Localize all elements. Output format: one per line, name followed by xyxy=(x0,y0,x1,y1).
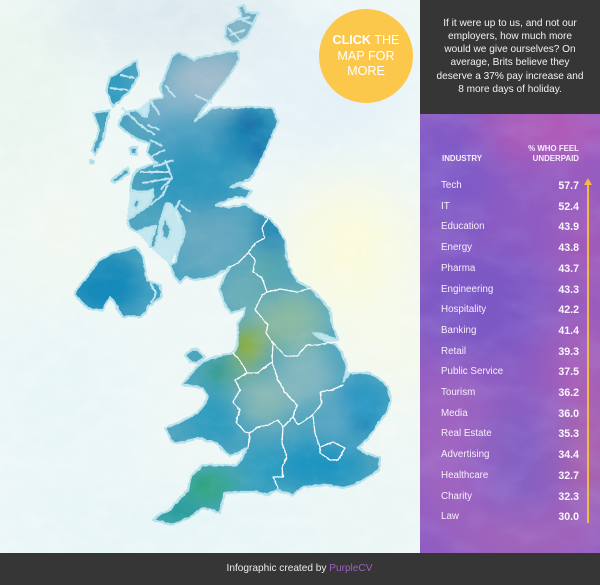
table header xyxy=(442,144,579,163)
table rows: Hospitality xyxy=(441,304,486,315)
table rows: 30.0 xyxy=(558,511,579,523)
table rows: 32.7 xyxy=(558,470,579,482)
East / South East xyxy=(313,415,320,447)
Wales / West Midlands xyxy=(233,373,250,448)
Yorkshire / East Midlands xyxy=(273,342,337,356)
region boundaries xyxy=(230,218,345,488)
North East / Yorkshire xyxy=(267,288,310,292)
table rows: 36.2 xyxy=(558,387,579,399)
watercolour land fill xyxy=(73,4,392,526)
footer credit: Infographic created by PurpleCV xyxy=(227,563,372,574)
map: United Kingdom regions xyxy=(73,4,392,526)
pale sea-loch wash on the west coast xyxy=(118,100,350,382)
table rows: 43.9 xyxy=(558,221,579,233)
table rows: 34.4 xyxy=(558,449,579,461)
intro text panel: 8 more days of holiday. xyxy=(458,84,562,95)
callout: click the map: CLICK THE xyxy=(333,33,399,47)
footer credit xyxy=(0,553,600,585)
table rows: 35.3 xyxy=(558,428,579,440)
intro text panel: average, Brits believe they xyxy=(451,57,569,68)
table rows: Education xyxy=(441,221,485,232)
intro text panel xyxy=(420,0,600,114)
Yorkshire / North West xyxy=(255,292,273,343)
table rows: Engineering xyxy=(441,284,493,295)
South West / South East xyxy=(273,427,287,488)
table rows: Banking xyxy=(441,325,476,336)
table rows: Public Service xyxy=(441,366,503,377)
table rows: 36.0 xyxy=(558,408,579,420)
callout: click the map: MORE xyxy=(347,64,385,78)
table rows xyxy=(441,180,579,523)
table rows: 42.2 xyxy=(558,304,579,316)
map area with watercolour background xyxy=(0,0,420,553)
table rows: Pharma xyxy=(441,263,475,274)
table rows: Healthcare xyxy=(441,470,488,481)
table rows: Advertising xyxy=(441,449,489,460)
table rows: Tourism xyxy=(441,387,475,398)
panel: industry table xyxy=(420,114,600,553)
pale coastline wash xyxy=(74,5,391,525)
West Midlands / East Midlands xyxy=(272,362,297,427)
West Midlands / South West xyxy=(250,420,283,433)
table rows: 32.3 xyxy=(558,491,579,503)
table rows: 37.5 xyxy=(558,366,579,378)
intro text panel: If it were up to us, and not our xyxy=(443,18,577,29)
North West / Wales xyxy=(233,353,272,373)
intro text panel: employers, how much more xyxy=(448,31,572,42)
table rows: 57.7 xyxy=(558,180,579,192)
East Midlands / East xyxy=(293,385,343,425)
table rows: 43.7 xyxy=(558,263,579,275)
table rows: 52.4 xyxy=(558,201,579,213)
table rows: Energy xyxy=(441,242,472,253)
intro text panel: deserve a 37% pay increase and xyxy=(436,71,584,82)
table rows: 41.4 xyxy=(558,325,579,337)
intro text panel: would we give ourselves? On xyxy=(444,44,576,55)
arrow: scale upward xyxy=(584,178,592,523)
table header: % WHO FEEL xyxy=(528,144,579,153)
London xyxy=(320,442,345,460)
table rows: 43.8 xyxy=(558,242,579,254)
table header: UNDERPAID xyxy=(533,154,579,163)
watercolour background xyxy=(0,0,440,570)
North West / Midlands xyxy=(272,343,273,362)
table rows: Tech xyxy=(441,180,462,191)
table rows: Retail xyxy=(441,346,466,357)
table header: INDUSTRY xyxy=(442,154,482,163)
table rows: Charity xyxy=(441,491,472,502)
sea lochs xyxy=(110,17,250,303)
North East / North West xyxy=(249,253,267,292)
table rows: 39.3 xyxy=(558,346,579,358)
table rows: Real Estate xyxy=(441,428,492,439)
table rows: 43.3 xyxy=(558,284,579,296)
Scotland / England border xyxy=(230,218,268,267)
table rows: Law xyxy=(441,511,459,522)
table rows: IT xyxy=(441,201,450,212)
callout: click the map xyxy=(319,9,413,103)
table rows: Media xyxy=(441,408,468,419)
callout: click the map: MAP FOR xyxy=(337,49,395,63)
